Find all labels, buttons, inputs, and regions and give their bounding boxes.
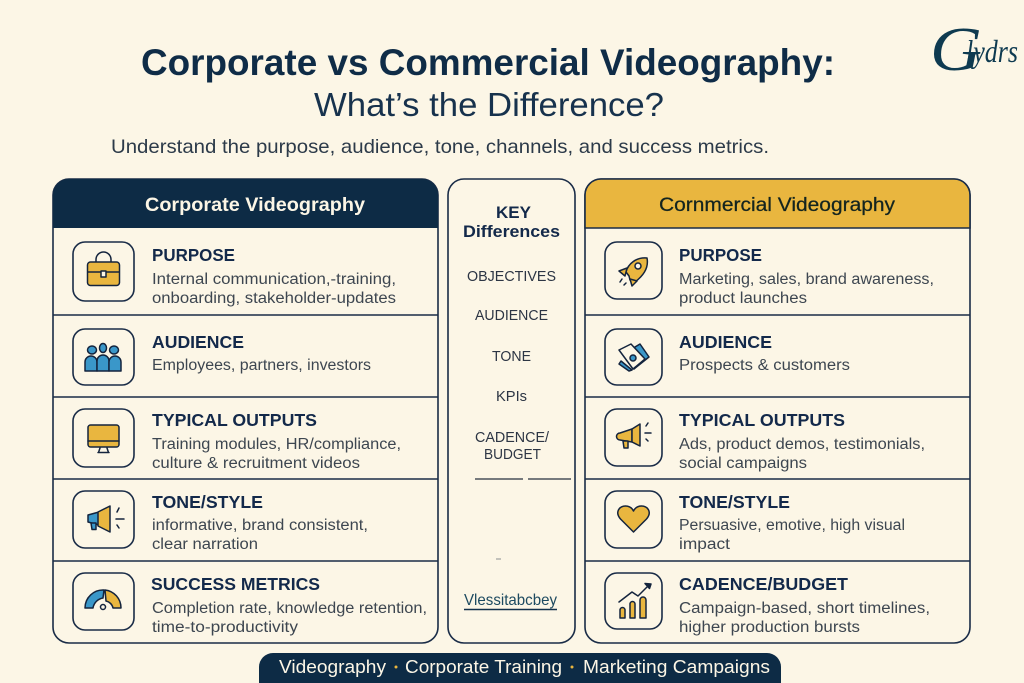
- tag bar: Marketing Campaigns: [583, 657, 770, 677]
- panel: key differences: OBJECTIVES: [467, 269, 556, 285]
- row: commercial tone/style: [605, 491, 905, 553]
- icon: growth chart: [619, 584, 651, 618]
- subtitle: Understand the purpose, audience, tone, channels, and success metrics.: [111, 136, 769, 158]
- row: corporate audience: AUDIENCE: [152, 332, 244, 352]
- row: commercial audience: [605, 329, 850, 385]
- row: commercial tone/style: TONE/STYLE: [679, 492, 790, 512]
- row: commercial purpose: product launches: [679, 290, 807, 307]
- heading: key differences: [463, 203, 560, 241]
- heading: key differences: Differences: [463, 222, 560, 241]
- title: Corporate vs Commercial Videography:: [141, 42, 835, 83]
- row: corporate audience: Employees, partners, investors: [152, 357, 371, 374]
- panel header: commercial: [585, 179, 970, 228]
- row: commercial audience: Prospects & customers: [679, 357, 850, 374]
- logo: Glydrs: [930, 16, 1018, 84]
- row: corporate purpose: Internal communication,-training,: [152, 271, 396, 288]
- title: [141, 42, 835, 123]
- row: corporate typical outputs: Training modules, HR/compliance,: [152, 436, 401, 453]
- row: commercial cadence/budget: Campaign-based, short timelines,: [679, 600, 930, 617]
- logo: Glydrs: G: [930, 16, 982, 84]
- title: What’s the Difference?: [314, 86, 664, 123]
- row: corporate purpose: PURPOSE: [152, 245, 235, 265]
- row: commercial purpose: PURPOSE: [679, 245, 762, 265]
- panel: key differences: KPIs: [496, 389, 527, 405]
- tag bar: Corporate Training: [405, 657, 562, 677]
- tag bar: [259, 653, 781, 683]
- row: commercial cadence/budget: higher production bursts: [679, 619, 860, 636]
- row: corporate success metrics: [73, 573, 427, 636]
- row: corporate tone/style: TONE/STYLE: [152, 492, 263, 512]
- row: corporate success metrics: SUCCESS METRICS: [151, 574, 320, 594]
- icon: megaphone: [617, 423, 651, 448]
- row: corporate typical outputs: [73, 409, 401, 472]
- row: commercial tone/style: Persuasive, emotive, high visual: [679, 517, 905, 534]
- panel: corporate videography: [53, 179, 438, 643]
- row: commercial typical outputs: TYPICAL OUTPUTS: [679, 410, 845, 430]
- tag bar: Videography: [279, 657, 386, 677]
- row: commercial purpose: Marketing, sales, brand awareness,: [679, 271, 934, 288]
- row: corporate tone/style: [73, 491, 368, 553]
- row: corporate typical outputs: culture & recruitment videos: [152, 455, 360, 472]
- row: corporate purpose: [73, 242, 396, 307]
- row: commercial cadence/budget: CADENCE/BUDGET: [679, 574, 848, 594]
- panel: key differences: TONE: [492, 349, 531, 365]
- icon: rocket: [619, 258, 647, 286]
- row: commercial typical outputs: [605, 409, 925, 472]
- heading: key differences: KEY: [496, 203, 532, 222]
- panel header: corporate: Corporate Videography: [145, 194, 365, 216]
- panel header: corporate: [53, 179, 438, 228]
- row: corporate typical outputs: TYPICAL OUTPUTS: [152, 410, 317, 430]
- panel: key differences: AUDIENCE: [475, 308, 548, 324]
- panel: key differences: BUDGET: [484, 447, 541, 463]
- row: corporate tone/style: informative, brand consistent,: [152, 517, 368, 534]
- row: corporate success metrics: Completion rate, knowledge retention,: [152, 600, 427, 617]
- panel: commercial videography: [585, 179, 970, 643]
- row: commercial tone/style: impact: [679, 536, 731, 553]
- icon: gauge: [85, 590, 121, 610]
- row: commercial cadence/budget: [605, 573, 930, 636]
- row: commercial audience: AUDIENCE: [679, 332, 772, 352]
- panel header: commercial: Cornmercial Videography: [659, 194, 895, 216]
- panel: key differences: CADENCE/: [475, 430, 550, 446]
- row: commercial typical outputs: social campaigns: [679, 455, 807, 472]
- signature scribble: Vlessitabcbey: [464, 592, 557, 609]
- row: commercial purpose: [605, 242, 934, 307]
- icon: megaphone: [88, 506, 124, 532]
- row: corporate audience: [73, 329, 371, 385]
- icon: people: [85, 344, 121, 371]
- icon: briefcase: [88, 252, 120, 286]
- icon: heart: [618, 506, 649, 532]
- panel: key differences: [448, 179, 575, 643]
- row: commercial typical outputs: Ads, product demos, testimonials,: [679, 436, 925, 453]
- icon: monitor: [88, 425, 119, 452]
- row: corporate tone/style: clear narration: [152, 536, 258, 553]
- row: corporate purpose: onboarding, stakeholder-updates: [152, 290, 396, 307]
- icon: tickets: [619, 344, 649, 371]
- row: corporate success metrics: time-to-productivity: [152, 619, 298, 636]
